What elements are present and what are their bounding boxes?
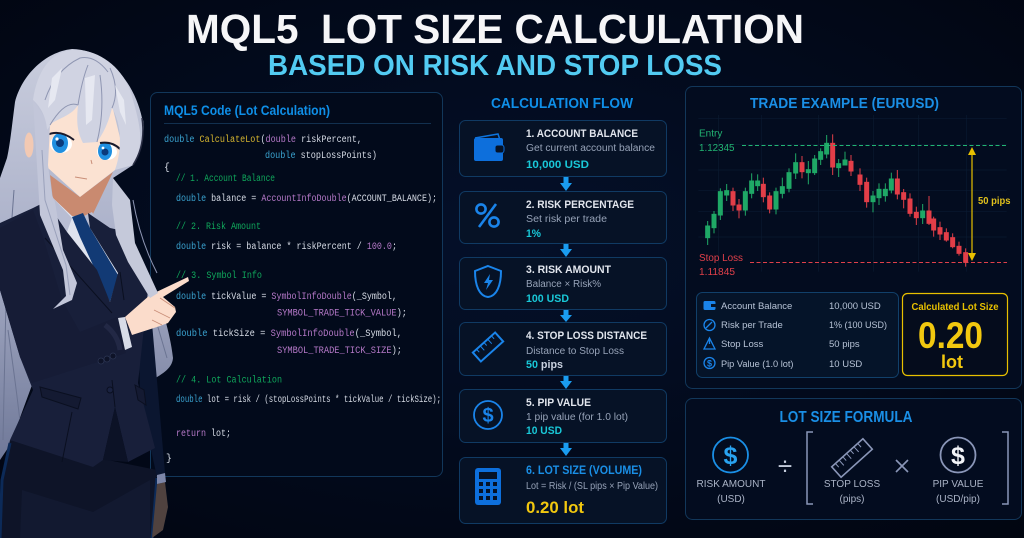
step 3: risk amount: Balance × Risk%: [526, 279, 601, 290]
shirt: [53, 198, 120, 304]
icon: stop loss triangle: [704, 338, 715, 349]
step 6: lot size: 6. LOT SIZE (VOLUME): [526, 465, 642, 477]
icon: risk gauge small: [704, 320, 715, 330]
code listing: // 4. Lot Calculation: [176, 374, 282, 386]
step 5: pip value: 1 pip value (for 1.0 lot): [526, 412, 628, 423]
pocket flap: [40, 387, 81, 409]
code listing: // 1. Account Balance: [176, 173, 275, 184]
label: stop loss: (pips): [839, 494, 865, 505]
formula heading: LOT SIZE FORMULA: [780, 409, 912, 426]
label: risk amount: (USD): [717, 494, 745, 505]
label: risk amount: [697, 479, 765, 505]
step 2: risk percentage: 2. RISK PERCENTAGE: [526, 199, 634, 211]
illustration: presenter character pointing at the code: [0, 49, 189, 538]
icon: pip value coin: $: [707, 358, 712, 368]
code listing: double balance = AccountInfoDouble(ACCOUNT_BALANCE);: [176, 193, 437, 204]
left eye: [47, 133, 74, 153]
code listing: [164, 134, 441, 464]
step 4: stop loss distance: Distance to Stop Loss: [526, 346, 624, 357]
code listing: SYMBOL_TRADE_TICK_VALUE);: [277, 308, 407, 318]
code listing: double lot = risk / (stopLossPoints * tickValue / tickSize);: [176, 394, 441, 405]
flow heading: CALCULATION FLOW: [491, 96, 633, 112]
far arm sleeve: [138, 290, 165, 477]
icon: wallet: [474, 134, 504, 161]
icon: ruler: [473, 333, 503, 361]
arrow: [560, 442, 572, 456]
icon: pip value dollar: $: [951, 442, 965, 470]
code listing: double tickSize = SymbolInfoDouble(_Symbol,: [176, 328, 402, 339]
multiply sign: [896, 460, 908, 472]
icon: pip value coin: [704, 358, 715, 368]
arrow: [560, 309, 572, 322]
code listing: double stopLossPoints): [265, 150, 377, 161]
label: stop loss: [824, 479, 880, 505]
title: MQL5 LOT SIZE CALCULATION: [186, 6, 804, 52]
step 5: pip value: 10 USD: [526, 425, 562, 437]
entry line and label: 1.12345: [699, 143, 735, 154]
icon: pip value dollar: [940, 438, 976, 472]
icon: wallet small: [704, 301, 716, 310]
lower hand: [152, 482, 168, 538]
arrow: 50 pips distance: 50 pips: [978, 196, 1011, 207]
mouth and nose: [75, 160, 92, 179]
step 2: risk percentage: 1%: [526, 228, 541, 240]
bangs: [33, 50, 140, 170]
code listing: }: [166, 453, 172, 464]
icon: risk amount dollar: $: [724, 442, 738, 470]
arrow: [560, 243, 572, 257]
code listing: {: [164, 162, 170, 173]
code listing: // 3. Symbol Info: [176, 270, 262, 281]
collar: [50, 198, 100, 232]
left front lock: [33, 100, 77, 309]
panel: lot size formula: [686, 398, 1022, 520]
left bracket: [807, 432, 813, 504]
code listing: return lot;: [176, 428, 231, 439]
entry line and label: [699, 128, 1007, 154]
entry line and label: Entry: [699, 128, 722, 140]
right bracket: [1002, 432, 1008, 504]
step 1: account balance: 10,000 USD: [526, 159, 589, 171]
code listing: double risk = balance * riskPercent / 100.0;: [176, 241, 397, 252]
icon: dollar coin: [474, 401, 502, 429]
trade example heading: TRADE EXAMPLE (EURUSD): [750, 95, 939, 112]
info table: Stop Loss: [721, 339, 763, 350]
info table: [696, 292, 898, 378]
step 6: lot size: 0.20 lot: [526, 498, 584, 517]
result: calculated lot size: Calculated Lot Size: [912, 301, 999, 313]
info table: 1% (100 USD): [829, 320, 887, 331]
label: risk amount: RISK AMOUNT: [697, 479, 765, 490]
code listing: double tickValue = SymbolInfoDouble(_Symbol,: [176, 291, 397, 302]
step 2: risk percentage: [460, 192, 666, 244]
step 5: pip value: [460, 390, 666, 442]
result: calculated lot size: [902, 294, 1008, 376]
icon: percent: [476, 204, 499, 227]
step 6: lot size: Lot = Risk / (SL pips × Pip Value): [526, 481, 658, 492]
info table: 10,000 USD: [829, 301, 881, 312]
icon: risk amount dollar: [713, 438, 748, 472]
label: stop loss: STOP LOSS: [824, 479, 880, 490]
info table: Pip Value (1.0 lot): [721, 359, 794, 370]
tie: [72, 213, 118, 302]
step 3: risk amount: [460, 258, 666, 310]
step 6: lot size: [460, 458, 666, 524]
code listing: double CalculateLot(double riskPercent,: [164, 134, 362, 145]
step 1: account balance: 1. ACCOUNT BALANCE: [526, 128, 638, 140]
icon: dollar coin: $: [482, 405, 494, 427]
step 1: account balance: Get current account balance: [526, 143, 655, 154]
step 3: risk amount: 100 USD: [526, 293, 569, 305]
info table: 50 pips: [829, 339, 860, 350]
panel: MQL5 code: [150, 92, 442, 476]
skirt: [0, 440, 157, 538]
icon: shield with bolt: [475, 266, 501, 297]
step 3: risk amount: 3. RISK AMOUNT: [526, 264, 611, 276]
ear: [24, 132, 34, 158]
icon: ruler: [832, 439, 872, 477]
stop loss line and label: [699, 253, 1007, 278]
back hair: [0, 49, 173, 460]
step 4: stop loss distance: 4. STOP LOSS DISTANCE: [526, 330, 647, 342]
icon: calculator: [475, 468, 501, 505]
info table: Risk per Trade: [721, 320, 783, 331]
panel: trade example: [686, 86, 1022, 388]
panel: calculation flow: [460, 96, 666, 524]
stop loss line and label: 1.11845: [699, 267, 735, 278]
arrow: [560, 375, 572, 389]
code panel heading: MQL5 Code (Lot Calculation): [164, 102, 330, 118]
neck: [50, 172, 113, 218]
label: pip value: PIP VALUE: [933, 479, 984, 490]
code listing: SYMBOL_TRADE_TICK_SIZE);: [277, 345, 402, 356]
sleeve: [0, 210, 126, 383]
result: calculated lot size: lot: [941, 352, 963, 372]
divide sign: ÷: [778, 451, 792, 481]
info table: 10 USD: [829, 359, 862, 370]
shirt cuff: [118, 317, 132, 350]
right eye: [97, 142, 120, 160]
step 4: stop loss distance: 50 pips: [526, 359, 563, 371]
code listing: // 2. Risk Amount: [176, 221, 261, 232]
arrow: 50 pips distance: [968, 147, 1011, 261]
stop loss line and label: Stop Loss: [699, 253, 743, 264]
subtitle: BASED ON RISK AND STOP LOSS: [268, 50, 722, 82]
face: [48, 100, 123, 197]
info table: Account Balance: [721, 301, 792, 312]
step 5: pip value: 5. PIP VALUE: [526, 397, 591, 409]
right hair strand: [112, 178, 158, 298]
candlestick chart: [698, 115, 1007, 272]
step 2: risk percentage: Set risk per trade: [526, 214, 607, 225]
label: pip value: (USD/pip): [936, 494, 980, 505]
step 4: stop loss distance: [460, 322, 666, 376]
pointing hand: [125, 277, 189, 335]
result: calculated lot size: 0.20: [918, 315, 983, 356]
step 1: account balance: [460, 120, 666, 176]
label: pip value: [933, 479, 984, 505]
jacket: [0, 198, 155, 467]
arrow: [560, 177, 572, 191]
